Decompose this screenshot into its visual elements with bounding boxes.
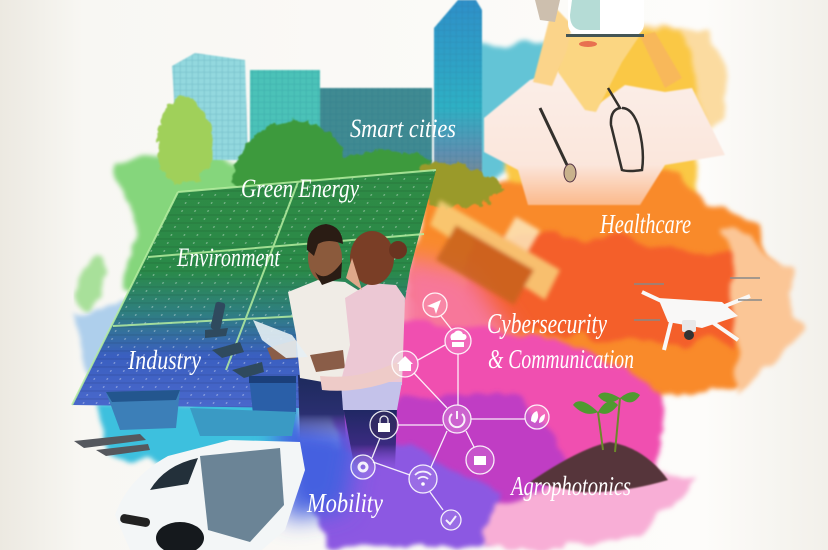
building: dark glass block: [320, 88, 432, 170]
splash: violet: [295, 445, 495, 550]
node: power: [443, 405, 471, 433]
man head: [307, 224, 343, 285]
label: Industry: Industry: [127, 345, 201, 375]
two engineers: [253, 224, 407, 470]
splash: warm orange main: [400, 165, 790, 405]
drone: [634, 278, 762, 350]
splash: pale orange edge: [725, 225, 800, 395]
doctor hands: [533, 5, 682, 88]
node: home: [392, 351, 418, 377]
drone arms and legs: [642, 292, 750, 350]
woman shirt: [340, 283, 405, 385]
node: lock: [370, 411, 398, 439]
car interior: [200, 448, 284, 542]
network links: [372, 316, 525, 510]
soil mound and sprouts: [530, 392, 668, 492]
woman head and hair: [346, 231, 407, 290]
node: gear: [351, 455, 375, 479]
node: wifi: [409, 465, 437, 493]
label: Healthcare: Healthcare: [599, 209, 691, 239]
splash: blue: [275, 415, 360, 520]
network diagram: [351, 293, 549, 530]
node: leaf: [525, 405, 549, 429]
blue crate centre: [249, 376, 296, 414]
concept car: [115, 440, 305, 550]
optical bench, warm photo tint: [430, 200, 560, 305]
woman trousers: [343, 406, 397, 470]
tree: mid green row: [232, 122, 432, 195]
splash: small green drops: [78, 254, 106, 306]
node: cloud: [445, 328, 471, 354]
splash: pink: [395, 320, 665, 500]
drone rotors: [634, 278, 762, 320]
city buildings: [172, 0, 482, 180]
label: Environment: Environment: [176, 243, 281, 272]
splash: pale blue: [72, 295, 155, 405]
lab equipment on bench: [74, 301, 296, 456]
building: pale left block: [172, 53, 248, 160]
doctor neck and face: [558, 35, 640, 112]
splash: green: [118, 150, 260, 335]
node: check: [441, 510, 461, 530]
trees: [158, 95, 505, 208]
drone camera: [682, 320, 696, 340]
splash: magenta: [335, 395, 575, 525]
doctor with VR headset: [484, 0, 725, 205]
solar panel: [72, 170, 436, 408]
man forearms: [267, 340, 345, 372]
car front wheel: [156, 522, 204, 550]
label: Cybersecurity & Communication: Cybersecurity: [487, 309, 607, 340]
tray: [190, 408, 296, 436]
splash: cyan lower left: [95, 395, 310, 480]
node: mail: [466, 446, 494, 474]
tree: golden right: [420, 163, 505, 208]
paper sheet: [253, 320, 308, 358]
tree: light green: [158, 95, 215, 186]
label: Green Energy: Green Energy: [241, 174, 359, 203]
label: Agrophotonics: Agrophotonics: [509, 471, 631, 501]
splash: sky blue top: [470, 38, 565, 190]
panel grid lines: [72, 170, 436, 405]
doctor hair: [535, 0, 560, 22]
panel surface: [72, 170, 436, 408]
mouth: [579, 41, 597, 47]
building: tall tower: [434, 0, 482, 180]
node: navigation: [423, 293, 447, 317]
blue crate left: [106, 390, 180, 430]
label: Mobility: Mobility: [306, 488, 383, 518]
sprouts: [598, 398, 620, 452]
splash: yellow: [500, 30, 700, 240]
stethoscope chestpiece: [564, 164, 576, 182]
splash: red orange: [470, 230, 780, 345]
stethoscope: [540, 88, 643, 171]
woman arm: [320, 362, 400, 391]
car windshield: [150, 458, 198, 490]
leaves: [573, 392, 640, 414]
vr headset: [566, 0, 644, 37]
car body: [115, 440, 305, 550]
label: Smart cities: Smart cities: [350, 114, 456, 143]
doctor coat: [484, 70, 725, 205]
car rear grille: [120, 513, 151, 528]
splash: pale pink lower right: [480, 460, 690, 550]
splash: pale peach top right: [640, 25, 730, 140]
woman lower shirt: [341, 382, 402, 410]
drone body: [658, 298, 738, 328]
man shirt: [288, 280, 366, 385]
label: Cybersecurity & Communication: [487, 309, 634, 374]
label: Cybersecurity & Communication: & Communication: [488, 344, 634, 374]
tools row: [205, 301, 264, 378]
handheld tools: [74, 434, 150, 456]
soil mound: [530, 442, 668, 492]
building: teal block: [250, 70, 320, 155]
splash: pink orange blend: [395, 255, 520, 360]
man trousers: [298, 375, 346, 440]
